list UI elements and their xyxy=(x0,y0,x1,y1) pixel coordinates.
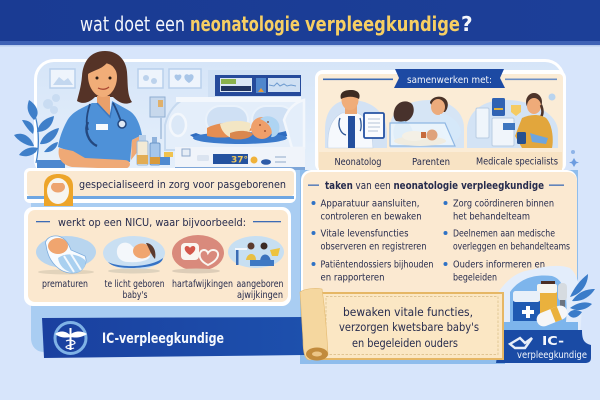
labels: ajwijkingen xyxy=(237,290,283,301)
title banner: ? xyxy=(461,12,473,36)
panel: IC-verpleegkundige ribbon: IC-verpleegkundige xyxy=(102,331,224,347)
icon: caduceus xyxy=(55,322,87,354)
icon: pill bottle xyxy=(537,281,567,320)
summary text: bewaken vitale functies, xyxy=(343,305,473,319)
heading: taken van een neonatologie verpleegkundige xyxy=(325,180,544,192)
main panel background xyxy=(31,59,578,364)
task list: right column: begeleiden xyxy=(453,272,497,284)
panel: samenwerken met xyxy=(315,69,566,172)
heading banner: samenwerken met: xyxy=(407,75,492,86)
figure: incubator xyxy=(165,97,305,170)
icon: congenital anomalies xyxy=(228,236,284,268)
task list: left column: Vitale levensfuncties xyxy=(320,228,408,240)
labels: prematuren xyxy=(42,279,88,290)
icon: leaves xyxy=(568,274,595,318)
icon: jar xyxy=(513,291,540,321)
labels xyxy=(42,279,284,301)
labels: baby's xyxy=(122,290,148,301)
title banner xyxy=(0,0,600,46)
label strip: Parenten xyxy=(412,157,450,168)
figure: parenten xyxy=(390,97,464,148)
title banner: neonatologie xyxy=(190,12,300,36)
summary text: en begeleiden ouders xyxy=(352,336,458,350)
label strip: Medicale specialists xyxy=(476,156,558,168)
label strip: Neonatolog xyxy=(334,157,382,168)
panel: nurse scene xyxy=(14,51,305,170)
icon: sparkles xyxy=(569,150,579,167)
task list: right column xyxy=(444,198,570,284)
labels: hartafwijkingen xyxy=(172,279,233,290)
scroll roll xyxy=(300,288,328,360)
icon: leaves xyxy=(14,100,59,163)
task list: left column xyxy=(312,198,434,284)
panel: IC-verpleegkundige ribbon xyxy=(42,317,305,358)
task list: left column: en rapporteren xyxy=(320,272,384,284)
panel: NICU: werkt op een NICU, waar bijvoorbeeld: xyxy=(58,217,246,229)
figure: nurse xyxy=(58,51,142,169)
figure: monitor xyxy=(215,75,301,96)
title banner: verpleegkundige xyxy=(305,12,460,36)
title banner: wat doet een xyxy=(80,12,185,36)
task list: left column: Apparatuur aansluiten, xyxy=(320,198,420,210)
labels: te licht geboren xyxy=(104,279,164,290)
panel: gespecialiseerd xyxy=(24,168,296,206)
task list: left column: controleren en bewaken xyxy=(320,212,422,222)
panel: corner illustration with medicine xyxy=(496,266,595,363)
task list: left column: observeren en registreren xyxy=(320,242,426,252)
icon: low birth weight baby xyxy=(103,236,165,274)
label strip xyxy=(319,152,562,170)
badge xyxy=(496,330,591,363)
figure: medische specialist xyxy=(467,93,558,148)
icon: swaddled baby xyxy=(44,174,73,206)
task list: right column: Ouders informeren en xyxy=(453,260,545,270)
task list: right column: Deelnemen aan medische xyxy=(453,228,555,240)
badge: verpleegkundige xyxy=(517,350,587,361)
icon: medicine vials xyxy=(137,97,173,165)
task list: left column: Patiëntendossiers bijhouden xyxy=(320,260,434,270)
icon: premature baby xyxy=(36,236,96,274)
panel: parchment scroll summary xyxy=(300,288,503,360)
icon: heart defects xyxy=(172,235,224,274)
wall decorations xyxy=(43,69,300,114)
figure: neonatoloog xyxy=(325,90,387,148)
heading banner xyxy=(394,69,505,88)
panel: NICU xyxy=(24,207,291,306)
panel: taken xyxy=(301,170,577,300)
summary text xyxy=(339,305,479,350)
table xyxy=(37,160,65,169)
summary text: verzorgen kwetsbare baby's xyxy=(339,320,479,334)
icon: capsule xyxy=(535,304,569,328)
figure: baby in incubator xyxy=(207,116,279,139)
labels: aangeboren xyxy=(236,279,284,290)
badge: IC- xyxy=(542,334,564,348)
panel: gespecialiseerd: gespecialiseerd in zorg voor pasgeborenen xyxy=(79,178,286,191)
task list: right column: Zorg coördineren binnen xyxy=(453,198,554,210)
task list: right column: het behandelteam xyxy=(453,212,530,222)
figure: incubator: 37° xyxy=(231,156,248,166)
